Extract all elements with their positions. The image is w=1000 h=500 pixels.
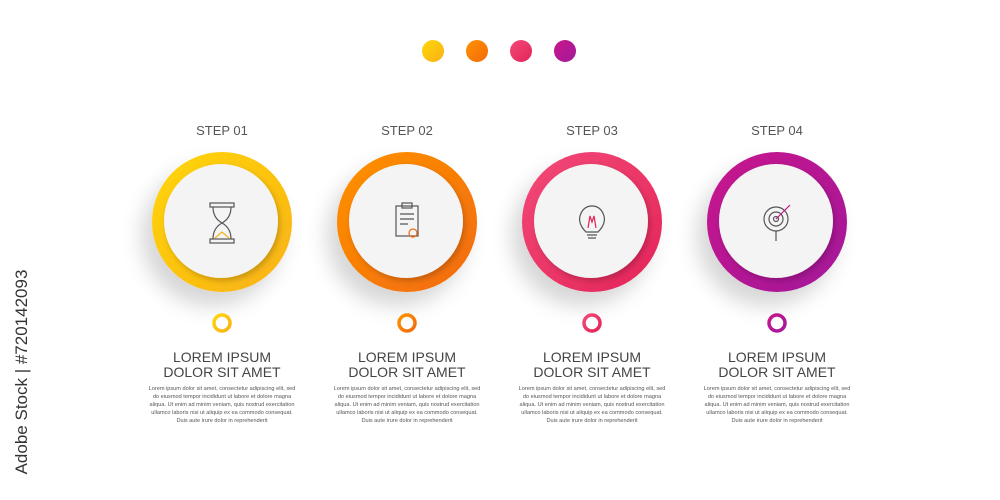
step 4: Lorem ipsum dolor sit amet, consectetur adipiscing elit, sed — [704, 386, 850, 392]
step 2: Duis aute irure dolor in reprehenderit — [361, 418, 453, 424]
step 3: do eiusmod tempor incididunt ut labore et dolore magna — [523, 394, 662, 400]
step 1: aliqua. Ut enim ad minim veniam, quis nostrud exercitation — [150, 402, 294, 408]
step 4: do eiusmod tempor incididunt ut labore et dolore magna — [708, 394, 847, 400]
step 2: DOLOR SIT AMET — [348, 364, 466, 380]
step 1 — [149, 123, 295, 424]
step 1: LOREM IPSUM — [173, 349, 271, 365]
step 3: LOREM IPSUM — [543, 349, 641, 365]
step 1: do eiusmod tempor incididunt ut labore et dolore magna — [153, 394, 292, 400]
step 4: LOREM IPSUM — [728, 349, 826, 365]
step 4: STEP 04 — [751, 123, 803, 138]
step 2 — [334, 123, 480, 424]
step 1: Lorem ipsum dolor sit amet, consectetur adipiscing elit, sed — [149, 386, 295, 392]
icon: light bulb — [580, 206, 604, 238]
step 3: Duis aute irure dolor in reprehenderit — [546, 418, 638, 424]
step 2: Lorem ipsum dolor sit amet, consectetur adipiscing elit, sed — [334, 386, 480, 392]
step 4 — [704, 123, 850, 424]
step 4: aliqua. Ut enim ad minim veniam, quis nostrud exercitation — [705, 402, 849, 408]
step 3: STEP 03 — [566, 123, 618, 138]
step 1: DOLOR SIT AMET — [163, 364, 281, 380]
step 2: LOREM IPSUM — [358, 349, 456, 365]
step 3: DOLOR SIT AMET — [533, 364, 651, 380]
icon: target — [764, 205, 790, 241]
step 3: ullamco laboris nisi ut aliquip ex ea commodo consequat. — [521, 410, 663, 416]
watermark text: Adobe Stock | #720142093 — [12, 270, 31, 474]
step 1: STEP 01 — [196, 123, 248, 138]
step 2: aliqua. Ut enim ad minim veniam, quis nostrud exercitation — [335, 402, 479, 408]
step 1: ullamco laboris nisi ut aliquip ex ea commodo consequat. — [151, 410, 293, 416]
step 2: do eiusmod tempor incididunt ut labore et dolore magna — [338, 394, 477, 400]
step 1: Duis aute irure dolor in reprehenderit — [176, 418, 268, 424]
step 2: STEP 02 — [381, 123, 433, 138]
icon: hourglass — [210, 203, 234, 243]
step 3 — [519, 123, 665, 424]
step 3: aliqua. Ut enim ad minim veniam, quis nostrud exercitation — [520, 402, 664, 408]
icon: clipboard — [396, 203, 418, 237]
step 2: ullamco laboris nisi ut aliquip ex ea commodo consequat. — [336, 410, 478, 416]
color dots — [422, 40, 576, 62]
step 4: ullamco laboris nisi ut aliquip ex ea commodo consequat. — [706, 410, 848, 416]
step 3: Lorem ipsum dolor sit amet, consectetur adipiscing elit, sed — [519, 386, 665, 392]
step 4: Duis aute irure dolor in reprehenderit — [731, 418, 823, 424]
step 4: DOLOR SIT AMET — [718, 364, 836, 380]
